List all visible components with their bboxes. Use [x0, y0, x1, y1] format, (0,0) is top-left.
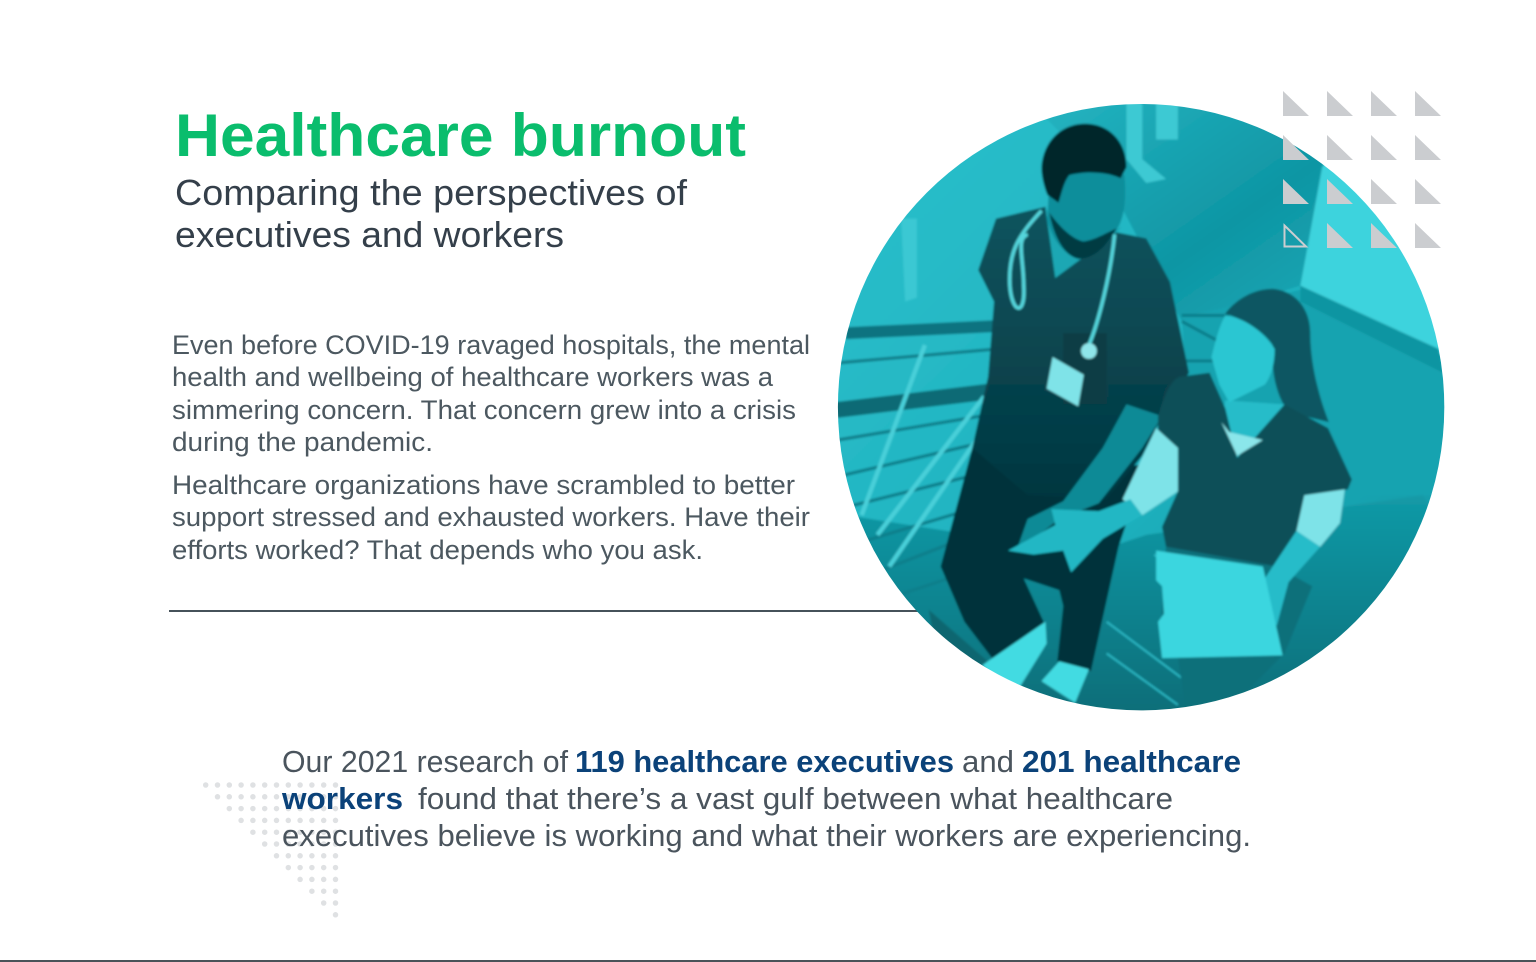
woman: hand and forearm [1008, 499, 1142, 572]
text block: intro paragraph two: Healthcare organizations have scrambled to better [172, 470, 795, 500]
text block: intro paragraph one: simmering concern. That concern grew into a crisis [172, 395, 796, 425]
woman: right sleeve [1296, 489, 1345, 547]
subtitle: Comparing the perspectives of [175, 172, 688, 213]
text block: intro paragraph one: Even before COVID-19 ravaged hospitals, the mental [172, 330, 810, 360]
background: pillars [1126, 100, 1178, 183]
photo: two healthcare workers on stairs [830, 100, 1455, 717]
man: face [1047, 171, 1125, 258]
background: stairs [858, 502, 1427, 710]
man: beard [1049, 213, 1117, 259]
text block: research summary: 201 healthcare [1022, 744, 1241, 779]
man: chest pocket shadow [1063, 333, 1107, 404]
woman: undershirt [1221, 422, 1263, 456]
text block: intro paragraph one: during the pandemic. [172, 427, 433, 457]
title: Healthcare burnout [175, 102, 746, 169]
text block: research summary: executives believe is working and what their workers are experiencing. [282, 818, 1251, 853]
man: shoes [982, 622, 1089, 703]
woman: left sleeve [1123, 428, 1178, 515]
text block: research summary: found that there’s a vast gulf between what healthcare [418, 781, 1173, 816]
text block: research summary: 119 healthcare executives [575, 744, 954, 779]
man: id badge [1047, 357, 1084, 406]
background: floor [1182, 290, 1447, 495]
woman: neck [1221, 400, 1285, 458]
woman: scrub top [1158, 373, 1352, 566]
man: arm and hand [1016, 404, 1162, 553]
woman: lower body [1161, 546, 1312, 683]
decorative dot triangle [206, 785, 336, 915]
man: trousers [941, 448, 1146, 671]
man: scrub top [972, 207, 1189, 499]
text block: intro paragraph two: efforts worked? That depends who you ask. [172, 535, 703, 565]
background: upper landing [1048, 104, 1324, 321]
text block: research summary: and [962, 744, 1014, 779]
background: light wall [1300, 164, 1440, 356]
text block: intro paragraph two [172, 470, 810, 565]
text block: research summary: Our 2021 research of [282, 744, 568, 779]
subtitle: executives and workers [175, 214, 564, 255]
railing [834, 315, 1229, 594]
woman: right arm [1263, 531, 1320, 626]
folder [1156, 551, 1283, 658]
man: hair [1041, 124, 1126, 203]
man: stethoscope [1010, 211, 1115, 345]
woman: hair [1225, 289, 1329, 422]
text block: intro paragraph one: health and wellbeing of healthcare workers was a [172, 362, 774, 392]
decorative triangle grid [1283, 91, 1441, 248]
text block: intro paragraph one [172, 330, 810, 457]
text block: intro paragraph two: support stressed and exhausted workers. Have their [172, 502, 810, 532]
woman: face [1211, 315, 1275, 402]
text block: research summary: workers [281, 781, 403, 816]
subtitle [175, 172, 688, 255]
man: neck [1045, 209, 1123, 278]
text block: research summary [281, 744, 1251, 853]
